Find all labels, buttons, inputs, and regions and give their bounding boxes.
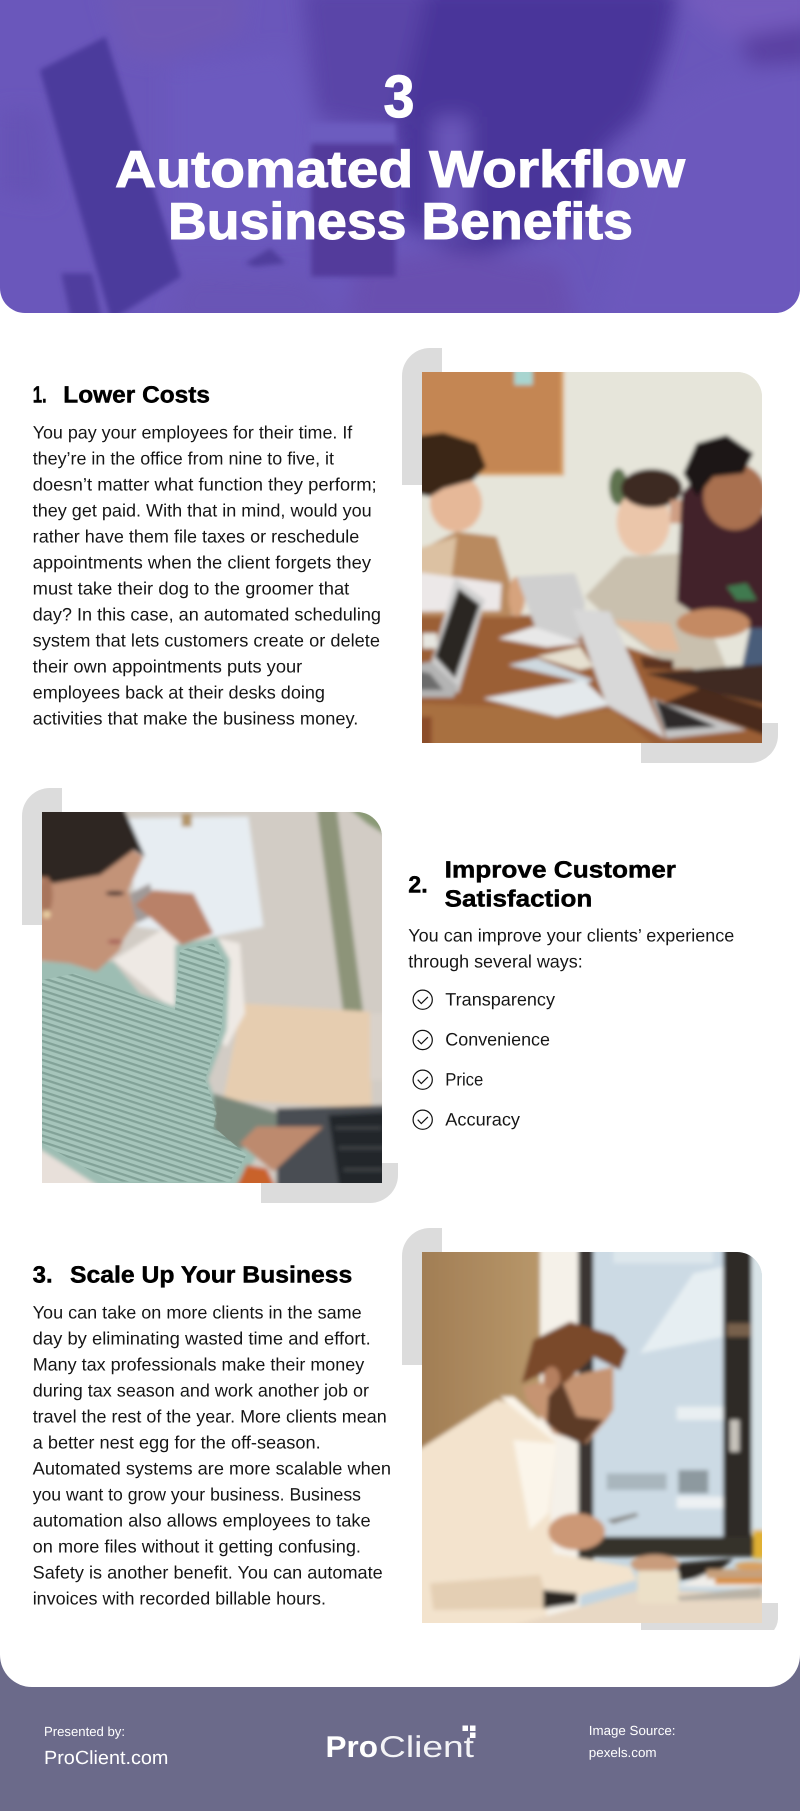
text block: scale up body: on more files without it getting confusing. bbox=[33, 1536, 361, 1556]
list item: transparency: Transparency bbox=[445, 990, 555, 1010]
title: heading text: Business Benefits bbox=[168, 193, 633, 251]
logo: ProClient: Client bbox=[379, 1731, 475, 1764]
heading: improve customer satisfaction: 2. bbox=[408, 871, 428, 897]
title: number 3: 3 bbox=[384, 63, 414, 130]
text block: scale up body bbox=[33, 1302, 391, 1608]
text block: presented by: Presented by: bbox=[44, 1724, 125, 1739]
heading: improve customer satisfaction bbox=[408, 857, 676, 911]
text block: lower costs body: they’re in the office from nine to five, it bbox=[33, 448, 334, 468]
panel: scale up section bbox=[33, 1228, 778, 1638]
text block: scale up body: invoices with recorded billable hours. bbox=[33, 1588, 326, 1608]
list item: price: Price bbox=[445, 1070, 483, 1090]
text block: presented by bbox=[44, 1724, 168, 1769]
list item: accuracy bbox=[413, 1110, 520, 1130]
text block: lower costs body: rather have them file taxes or reschedule bbox=[33, 526, 359, 546]
text block: scale up body: day by eliminating wasted time and effort. bbox=[33, 1328, 371, 1348]
text block: image source bbox=[589, 1723, 676, 1760]
text block: scale up body: Automated systems are more scalable when bbox=[33, 1458, 391, 1478]
heading: scale up your business: Scale Up Your Business bbox=[70, 1261, 352, 1287]
heading: improve customer satisfaction: Improve Customer bbox=[445, 857, 676, 883]
text block: lower costs body: must take their dog to the groomer that bbox=[33, 578, 349, 598]
logo: ProClient bbox=[326, 1726, 476, 1764]
title: heading text: Automated Workflow bbox=[115, 141, 686, 199]
heading: lower costs: 1. bbox=[33, 381, 47, 407]
text block: scale up body: travel the rest of the year. More clients mean bbox=[33, 1406, 387, 1426]
text block: scale up body: Many tax professionals make their money bbox=[33, 1354, 364, 1374]
text block: lower costs body: day? In this case, an automated scheduling bbox=[33, 604, 381, 624]
panel: footer bbox=[0, 1630, 800, 1811]
text block: lower costs body: appointments when the client forgets they bbox=[33, 552, 371, 572]
text block: lower costs body: employees back at their desks doing bbox=[33, 682, 325, 702]
list item: accuracy: Accuracy bbox=[445, 1110, 520, 1130]
text block: lower costs body: You pay your employees for their time. If bbox=[33, 422, 353, 442]
logo: ProClient: Pro bbox=[326, 1731, 378, 1764]
sweater knit texture bbox=[42, 943, 247, 1182]
text block: improve satisfaction intro: through several ways: bbox=[408, 952, 583, 972]
header background photo, purple tinted bbox=[0, 0, 800, 327]
list item: convenience: Convenience bbox=[445, 1030, 550, 1050]
text block: image source: pexels.com bbox=[589, 1745, 657, 1760]
text block: scale up body: Safety is another benefit. You can automate bbox=[33, 1562, 383, 1582]
text block: lower costs body bbox=[33, 422, 381, 728]
text block: improve satisfaction intro bbox=[408, 926, 734, 972]
title: heading text bbox=[115, 141, 686, 251]
photo frame: team meeting bbox=[402, 348, 778, 763]
text block: scale up body: you want to grow your business. Business bbox=[33, 1484, 361, 1504]
list item: price bbox=[413, 1070, 483, 1090]
text block: lower costs body: doesn’t matter what function they perform; bbox=[33, 474, 377, 494]
panel: header bbox=[0, 0, 800, 327]
heading: lower costs: Lower Costs bbox=[63, 381, 210, 407]
text block: scale up body: automation also allows employees to take bbox=[33, 1510, 371, 1530]
text block: scale up body: during tax season and work another job or bbox=[33, 1380, 369, 1400]
photo frame: woman on laptop bbox=[22, 788, 398, 1203]
panel: improve customer satisfaction section bbox=[22, 788, 734, 1203]
text block: presented by: ProClient.com bbox=[44, 1748, 168, 1769]
panel: lower costs section bbox=[33, 348, 778, 763]
heading: scale up your business: 3. bbox=[33, 1261, 53, 1287]
text block: lower costs body: activities that make the business money. bbox=[33, 708, 358, 728]
text block: lower costs body: they get paid. With that in mind, would you bbox=[33, 500, 372, 520]
text block: scale up body: You can take on more clients in the same bbox=[33, 1302, 362, 1322]
text block: scale up body: a better nest egg for the off-season. bbox=[33, 1432, 321, 1452]
text block: image source: Image Source: bbox=[589, 1723, 676, 1738]
text block: lower costs body: system that lets customers create or delete bbox=[33, 630, 380, 650]
text block: improve satisfaction intro: You can improve your clients’ experience bbox=[408, 926, 734, 946]
text block: lower costs body: their own appointments puts your bbox=[33, 656, 302, 676]
heading: improve customer satisfaction: Satisfaction bbox=[445, 885, 592, 911]
checklist bbox=[413, 990, 555, 1130]
photo frame: man with phone bbox=[402, 1228, 778, 1638]
